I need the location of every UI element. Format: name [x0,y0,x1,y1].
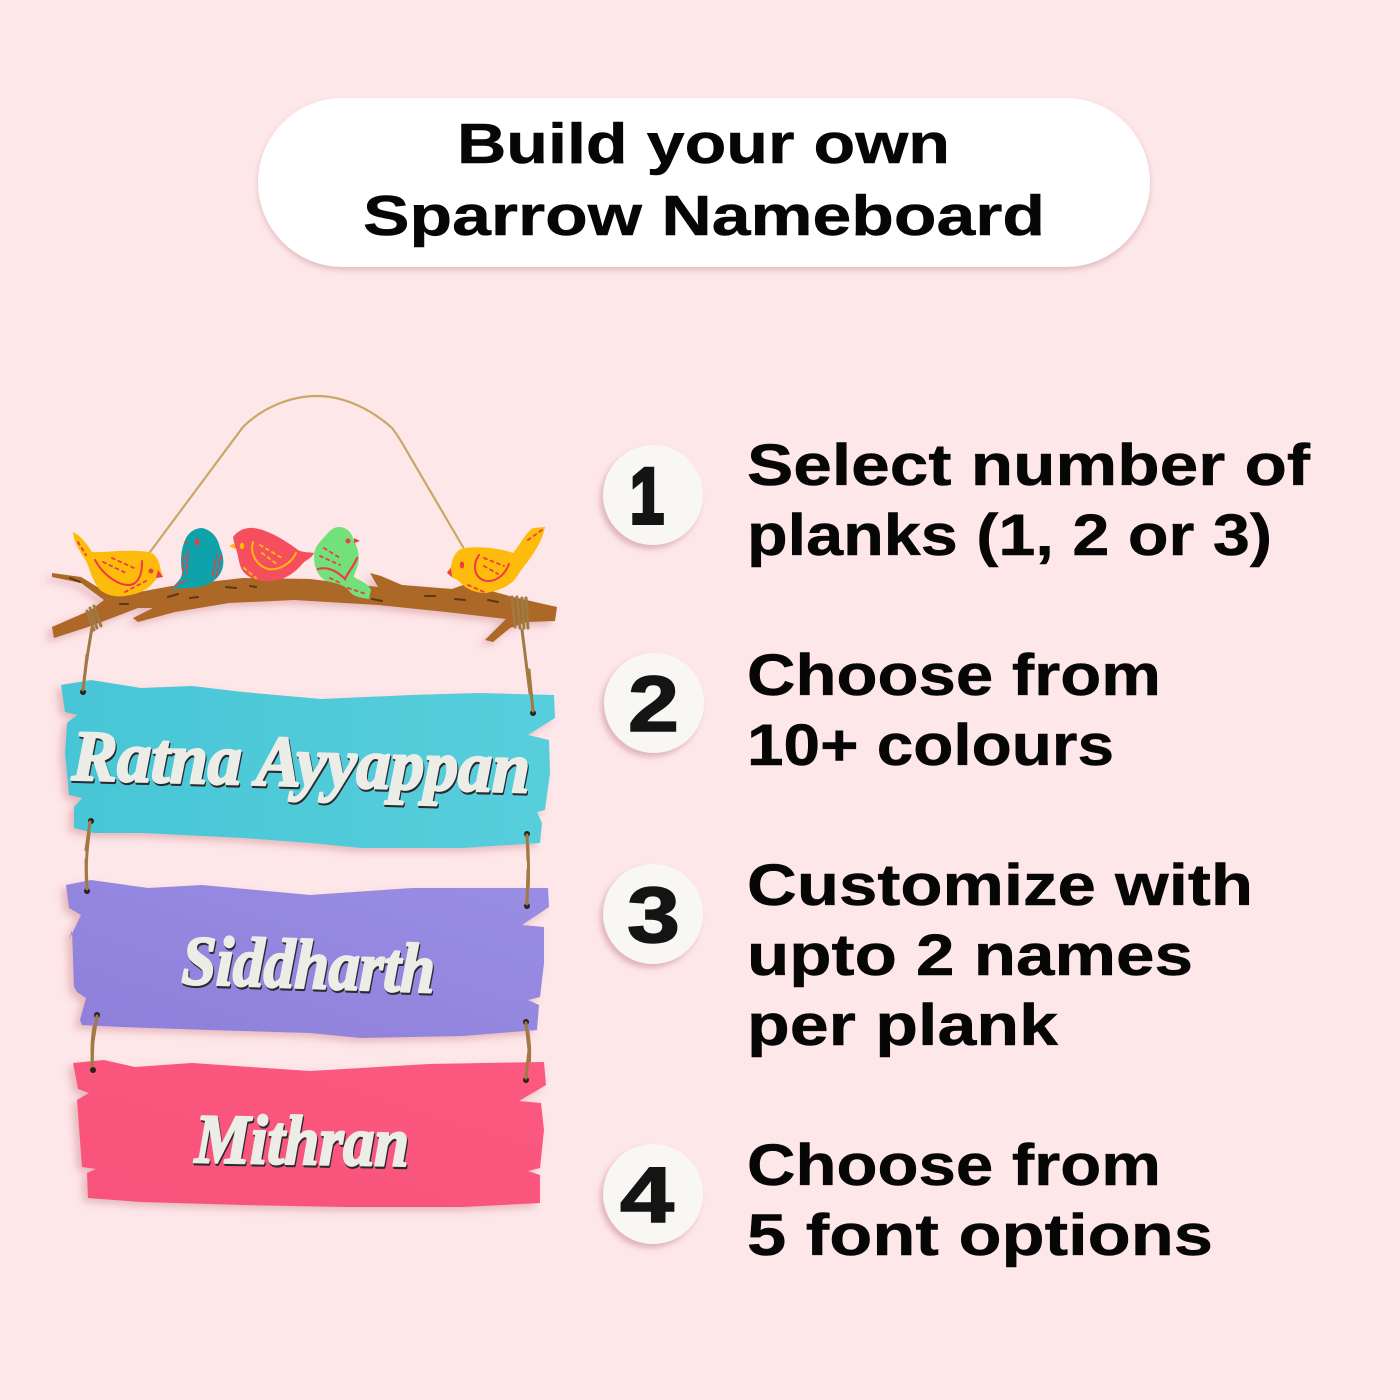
text 2: 10+ colours [747,713,1114,778]
badge 4 [603,1144,703,1244]
badge 2 [604,653,704,753]
text 4: Choose from [747,1133,1161,1198]
text 2: Choose from [747,643,1161,708]
title pill [258,98,1150,267]
ropes between planks [83,628,533,1080]
text 1: Select number of [747,433,1311,498]
hanging string [150,396,463,552]
title pill: Build your own [457,112,950,176]
badge 1: 1 [630,451,664,540]
plank: pink [73,1040,546,1207]
name: Siddharth: Siddharth [182,925,437,1010]
text 1: planks (1, 2 or 3) [747,503,1272,568]
badge 3: 3 [627,870,680,959]
text 3: per plank [747,993,1059,1058]
plank: teal [61,655,555,860]
bird: green [314,527,371,599]
step 4 [603,1133,1213,1268]
step 1 [603,433,1311,568]
badge 2: 2 [628,659,679,748]
name: Mithran: Mithran [193,1101,410,1182]
text 3 [747,853,1253,1058]
text 4: 5 font options [747,1203,1213,1268]
name: Mithran: Mithran [194,1103,411,1184]
title pill: Sparrow Nameboard [363,184,1045,248]
text 3: upto 2 names [747,923,1193,988]
text 3: Customize with [747,853,1253,918]
text 4 [747,1133,1213,1268]
badge 3 [603,864,703,964]
name: Ratna Ayyappan: Ratna Ayyappan [71,718,532,810]
bird: teal [172,528,223,589]
bird: yellow left [73,532,163,596]
bird: coral [229,528,314,581]
name: Ratna Ayyappan: Ratna Ayyappan [70,716,531,808]
branch [52,573,557,642]
nameboard illustration [52,396,557,1207]
plank: purple [66,860,549,1050]
twine wraps [87,597,528,630]
bird: yellow right [447,527,545,593]
badge 4: 4 [620,1150,674,1239]
step 3 [603,853,1253,1058]
badge 1 [603,445,703,545]
text 1 [747,433,1311,568]
name: Siddharth: Siddharth [181,923,436,1008]
text 2 [747,643,1161,778]
step 2 [604,643,1161,778]
